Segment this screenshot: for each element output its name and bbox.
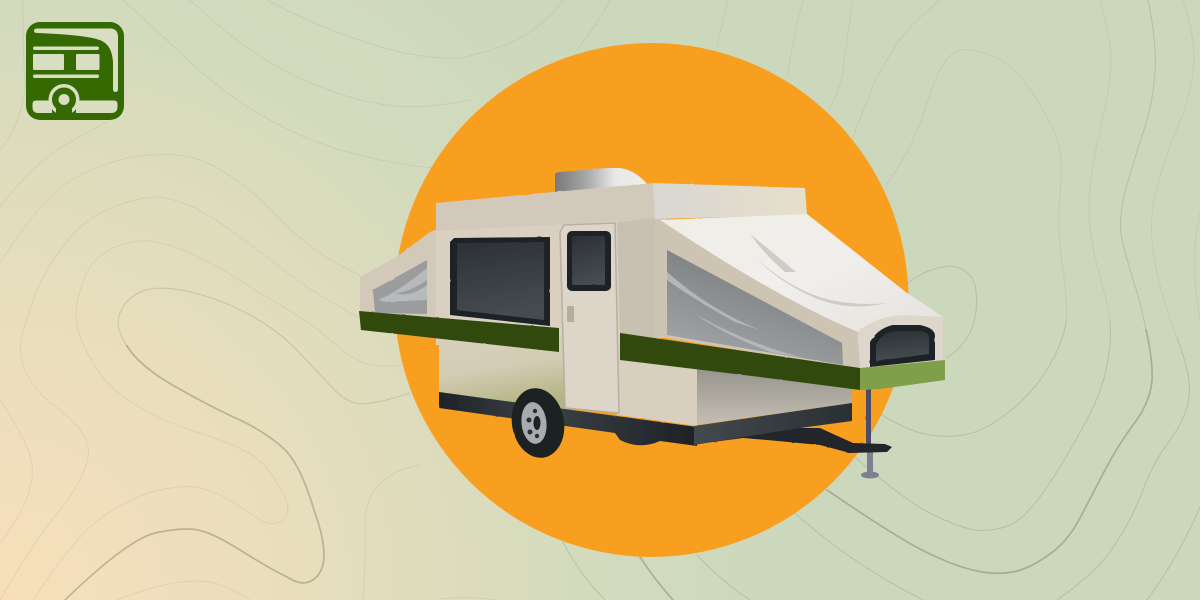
upper body wall (436, 214, 660, 345)
light green end stripe (860, 360, 945, 390)
left fold-out bunk (360, 228, 440, 330)
bunk end cap (858, 315, 943, 372)
frame front (694, 403, 852, 445)
under-bunk recess (697, 355, 852, 425)
big side window (450, 237, 550, 326)
green side stripe, right (620, 333, 860, 390)
logo icon: green camper badge (26, 22, 124, 120)
frame rail (439, 392, 697, 446)
green side stripe, left (359, 311, 559, 352)
wheel (506, 384, 570, 462)
roof air conditioner (555, 168, 647, 192)
tongue hitch (690, 428, 892, 453)
lower body right of door (617, 345, 697, 426)
camper trailer (359, 168, 945, 478)
side panel right of door (617, 218, 655, 340)
roof band (436, 183, 655, 231)
right fold-out bunk (655, 214, 943, 370)
door (560, 223, 619, 413)
jack stand (861, 388, 879, 478)
lower body left (439, 328, 565, 412)
orange circle backdrop (394, 43, 908, 557)
right roof band (653, 183, 807, 219)
